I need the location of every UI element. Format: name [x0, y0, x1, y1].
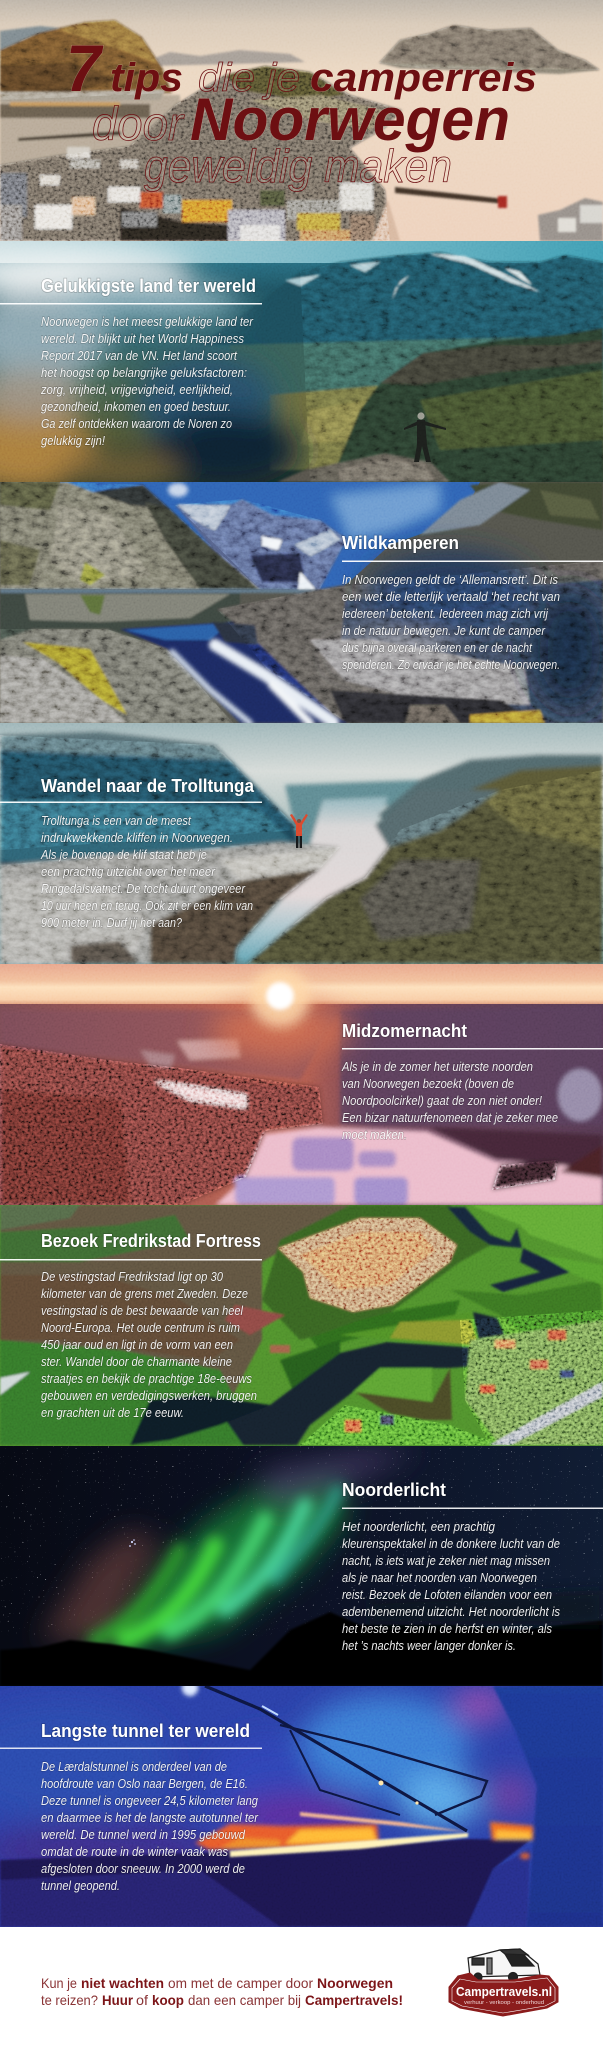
title: die je	[198, 56, 300, 100]
call to action text: dan een camper bij	[188, 1992, 301, 2008]
body text: wereld. De tunnel werd in 1995 gebouwd	[41, 1828, 246, 1842]
call to action text	[41, 1975, 403, 2008]
panel: Midzomernacht	[0, 964, 603, 1205]
divider rule	[342, 1508, 603, 1509]
body text: Noordpoolcirkel) gaat de zon niet onder!	[342, 1094, 542, 1108]
body text: Noord-Europa. Het oude centrum is ruim	[41, 1321, 240, 1335]
body text: het hoogst op belangrijke geluksfactoren:	[41, 366, 247, 380]
body text: Het noorderlicht, een prachtig	[342, 1520, 495, 1534]
call to action text: of	[136, 1992, 148, 2008]
call to action text: te reizen?	[41, 1992, 98, 2008]
body text: gezondheid, inkomen en goed bestuur.	[41, 400, 231, 414]
body text: Trolltunga is een van de meest	[41, 814, 191, 828]
heading: Noorderlicht	[342, 1480, 446, 1500]
logo: Campertravels.nl	[449, 1949, 558, 2016]
divider rule	[342, 1048, 603, 1050]
body text: In Noorwegen geldt de ‘Allemansrett’. Dit is	[342, 573, 558, 587]
body text: gebouwen en verdedigingswerken, bruggen	[41, 1389, 257, 1403]
body text: De Lærdalstunnel is onderdeel van de	[41, 1760, 227, 1774]
photo: Laerdal tunnel with blue and orange lighting	[0, 1680, 603, 1927]
body text: vestingstad is de best bewaarde van heel	[41, 1304, 244, 1318]
heading: Wandel naar de Trolltunga	[41, 776, 255, 796]
body text: adembenemend uitzicht. Het noorderlicht is	[342, 1605, 560, 1619]
heading: Midzomernacht	[342, 1021, 467, 1041]
body text: in de natuur bewegen. Je kunt de camper	[342, 624, 546, 638]
body text: iedereen’ betekent. Iedereen mag zich vrij	[342, 607, 549, 621]
body text: reist. Bezoek de Lofoten eilanden voor een	[342, 1588, 552, 1602]
body text: nacht, is iets wat je zeker niet mag missen	[342, 1554, 550, 1568]
logo: Campertravels.nl: Campertravels.nl	[456, 1985, 552, 1999]
body text: Deze tunnel is ongeveer 24,5 kilometer lang	[41, 1794, 258, 1808]
body text: kilometer van de grens met Zweden. Deze	[41, 1287, 248, 1301]
photo: aurora over dark mountains	[0, 1446, 603, 1686]
body text	[40, 814, 253, 930]
body text: het ’s nachts weer langer donker is.	[342, 1639, 516, 1653]
body text: van Noorwegen bezoekt (boven de	[342, 1077, 514, 1091]
divider rule	[0, 1259, 262, 1260]
body text: het beste te zien in de herfst en winter, als	[342, 1622, 552, 1636]
body text: indrukwekkende kliffen in Noorwegen.	[41, 831, 233, 845]
body text: zorg, vrijheid, vrijgevigheid, eerlijkheid,	[40, 383, 233, 397]
panel: footer call to action	[0, 1927, 603, 2048]
call to action text: Huur	[102, 1992, 134, 2008]
body text: omdat de route in de winter vaak was	[41, 1845, 228, 1859]
body text: Als je bovenop de klif staat heb je	[40, 848, 207, 862]
body text: kleurenspektakel in de donkere lucht van de	[342, 1537, 560, 1551]
panel: Bezoek Fredrikstad Fortress	[0, 1205, 603, 1446]
body text: De vestingstad Fredrikstad ligt op 30	[41, 1270, 223, 1284]
panel: Langste tunnel ter wereld	[0, 1680, 603, 1927]
heading: Bezoek Fredrikstad Fortress	[41, 1231, 261, 1251]
title: tips	[110, 56, 183, 100]
divider rule	[342, 560, 603, 562]
body text: 10 uur heen en terug. Ook zit er een klim van	[41, 899, 253, 913]
icon: camper van	[468, 1949, 540, 1982]
title	[66, 31, 537, 192]
call to action text: Kun je	[41, 1975, 77, 1991]
body text	[40, 315, 254, 448]
body text: als je naar het noorden van Noorwegen	[342, 1571, 537, 1585]
body text: hoofdroute van Oslo naar Bergen, de E16.	[41, 1777, 248, 1791]
body text: 900 meter in. Durf jij het aan?	[41, 916, 182, 930]
photo: Trolltunga cliff above the lake	[0, 723, 603, 964]
heading: Wildkamperen	[342, 533, 459, 553]
body text: spenderen. Zo ervaar je het echte Noorwegen.	[342, 658, 560, 672]
call to action text: Campertravels!	[305, 1992, 403, 2008]
divider rule	[0, 1748, 262, 1749]
body text: Ringedalsvatnet. De tocht duurt ongeveer	[41, 882, 246, 896]
icon: hiker in red jacket	[290, 814, 308, 848]
divider rule	[0, 303, 262, 304]
call to action text: om met de camper door	[168, 1975, 313, 1991]
badge	[449, 1973, 558, 2016]
body text: wereld. Dit blijkt uit het World Happiness	[41, 332, 244, 346]
body text	[41, 1760, 259, 1893]
body text	[342, 1520, 560, 1653]
divider rule	[0, 802, 262, 803]
body text: Noorwegen is het meest gelukkige land ter	[41, 315, 254, 329]
body text: een prachtig uitzicht over het meer	[41, 865, 216, 879]
body text: tunnel geopend.	[41, 1879, 120, 1893]
title: camperreis	[310, 56, 537, 100]
call to action text: Noorwegen	[317, 1975, 393, 1991]
body text: Een bizar natuurfenomeen dat je zeker mee	[342, 1111, 558, 1125]
title: Noorwegen	[190, 86, 510, 153]
logo: Campertravels.nl: verhuur - verkoop - onderhoud	[464, 2000, 544, 2006]
title: door	[92, 97, 185, 150]
hero photo: Alesund city and fjord at sunset	[0, 0, 603, 241]
body text: straatjes en bekijk de prachtige 18e-eeuws	[41, 1372, 252, 1386]
photo: lake, mountains and waterfall	[0, 482, 603, 723]
photo: aerial view of star-shaped fortress town	[0, 1205, 603, 1446]
title: 7	[66, 31, 104, 105]
call to action text: niet wachten	[81, 1975, 164, 1991]
body text: Als je in de zomer het uiterste noorden	[341, 1060, 533, 1074]
star cluster	[129, 1539, 136, 1547]
tunnel ceiling structure	[205, 1686, 487, 1831]
body text: en grachten uit de 17e eeuw.	[41, 1406, 184, 1420]
body text: een wet die letterlijk vertaald ‘het recht van	[342, 590, 560, 604]
heading: Langste tunnel ter wereld	[41, 1721, 250, 1741]
body text: 450 jaar oud en ligt in de vorm van een	[41, 1338, 233, 1352]
photo: midnight sun over snowy forest	[0, 964, 603, 1205]
body text: Report 2017 van de VN. Het land scoort	[41, 349, 237, 363]
panel: Wandel naar de Trolltunga	[0, 723, 603, 964]
heading: Gelukkigste land ter wereld	[41, 276, 256, 296]
photo: mountain valley with hiker	[0, 241, 603, 492]
title: geweldig maken	[144, 140, 452, 192]
body text: gelukkig zijn!	[41, 434, 105, 448]
body text: ster. Wandel door de charmante kleine	[41, 1355, 232, 1369]
body text	[41, 1270, 257, 1420]
body text	[341, 1060, 558, 1142]
icon: hiker with outstretched arms	[404, 412, 446, 462]
body text: dus bijna overal parkeren en er de nacht	[342, 641, 532, 655]
panel: Noorderlicht	[0, 1446, 603, 1686]
panel: Wildkamperen	[0, 482, 603, 723]
panel: hero header	[0, 0, 603, 241]
body text: moet maken.	[342, 1128, 407, 1142]
body text: en daarmee is het de langste autotunnel ter	[41, 1811, 259, 1825]
body text: Ga zelf ontdekken waarom de Noren zo	[41, 417, 232, 431]
panel: Gelukkigste land ter wereld	[0, 241, 603, 492]
body text: afgesloten door sneeuw. In 2000 werd de	[41, 1862, 245, 1876]
body text	[342, 573, 560, 672]
call to action text: koop	[152, 1992, 184, 2008]
